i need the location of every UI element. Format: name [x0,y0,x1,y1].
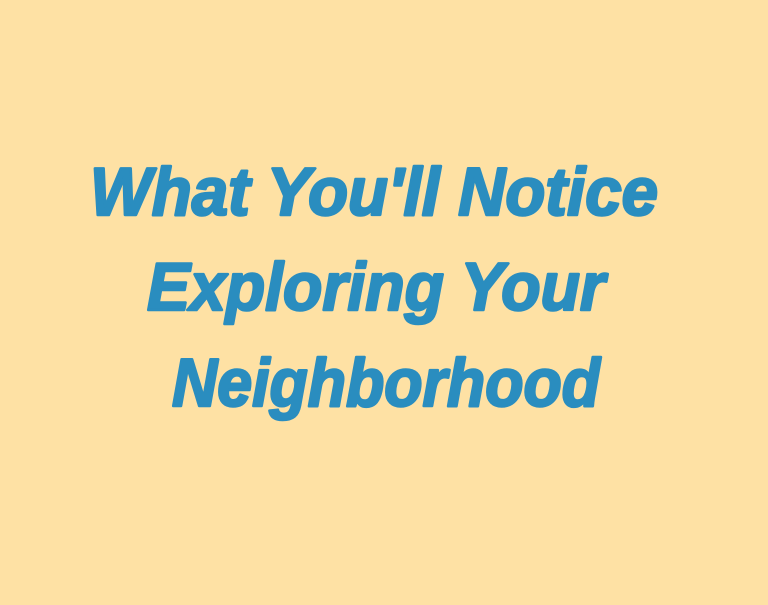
title: Neighborhood [172,345,601,421]
title: Exploring Your [147,249,608,325]
title: What You'll Notice [90,154,658,230]
